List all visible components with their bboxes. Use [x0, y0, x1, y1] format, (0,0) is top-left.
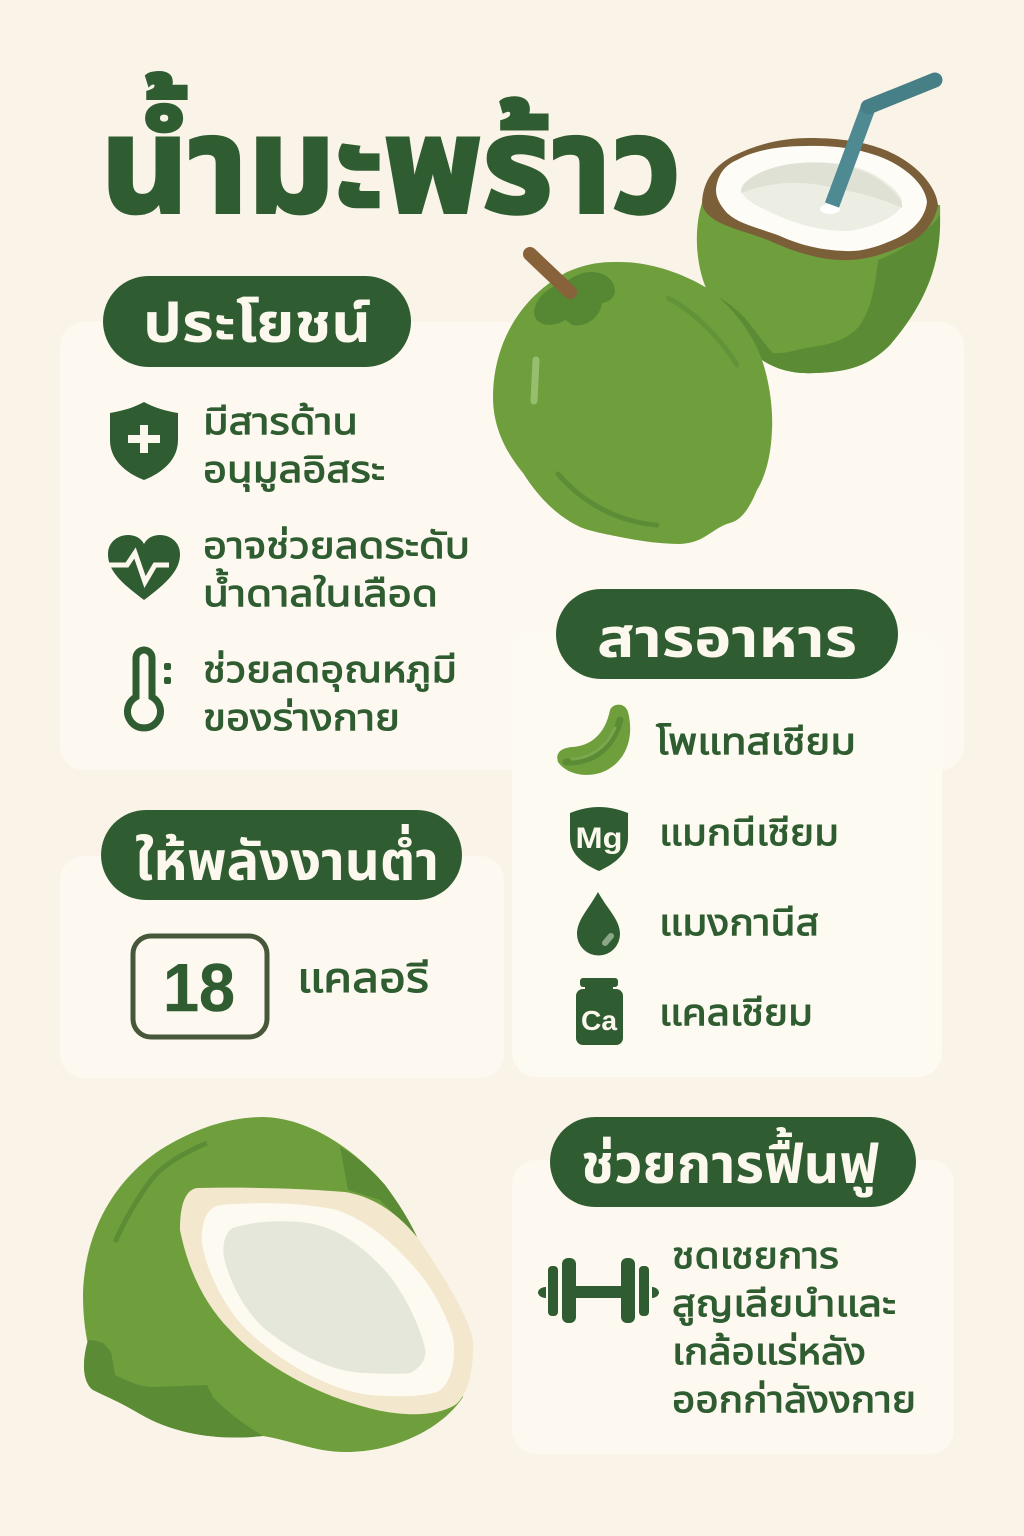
recovery text [672, 1235, 916, 1420]
heading: low energy: ให้พลังงานต่ำ [135, 824, 439, 892]
recovery text: ชดเชยการ [672, 1235, 839, 1276]
heading: benefits: ประโยชน์ [143, 294, 371, 354]
nutrient: manganese: แมงกานีส [659, 902, 819, 943]
benefit: blood sugar: อาจช่วยลดระดับ [203, 525, 470, 566]
illustration: whole green coconut [493, 254, 772, 544]
recovery text: เกล้อแร่หลัง [672, 1331, 866, 1372]
heading: low energy [101, 810, 462, 900]
heading: nutrients [556, 589, 898, 679]
heading: recovery [550, 1117, 916, 1207]
illustration: halved coconut [83, 1117, 473, 1452]
icon: calcium bottle: Ca [581, 1005, 617, 1036]
benefit: blood sugar [203, 525, 470, 614]
icon: dumbbell [538, 1258, 659, 1323]
icon: calcium bottle [576, 978, 623, 1045]
icon: manganese drop [577, 892, 620, 956]
heading: benefits [103, 276, 411, 367]
icon: magnesium shield: Mg [576, 822, 622, 855]
benefit: antioxidants: อนุมูลอิสระ [203, 449, 385, 492]
heading: recovery: ช่วยการฟื้นฟู [581, 1127, 879, 1197]
benefit: body temperature: ของร่างกาย [203, 697, 400, 738]
benefit: body temperature: ช่วยลดอุณหภูมี [203, 649, 457, 692]
icon: heart [108, 535, 180, 600]
panel: nutrients [512, 632, 942, 1077]
panel: benefits [60, 322, 964, 770]
icon: thermometer [127, 650, 171, 728]
icon: potassium banana [557, 705, 630, 775]
benefit: antioxidants [203, 401, 385, 492]
illustration: open coconut with straw [697, 80, 940, 373]
title: น้ำมะพร้าว [101, 73, 681, 241]
calorie value box [133, 936, 267, 1037]
icon: shield [110, 402, 178, 480]
recovery text: สูญเลียนำและ [672, 1283, 896, 1326]
panel: low energy [60, 856, 504, 1078]
calorie value box: 18 [163, 950, 235, 1026]
recovery text: ออกก่าลังงกาย [672, 1379, 916, 1420]
nutrient: potassium: โพแทสเชียม [656, 721, 856, 762]
benefit: antioxidants: มีสารด้าน [203, 401, 358, 442]
calorie unit: แคลอรี [297, 955, 429, 1001]
heading: nutrients: สารอาหาร [597, 609, 857, 669]
panel: recovery [512, 1160, 954, 1454]
nutrient: magnesium: แมกนีเชียม [659, 812, 839, 853]
benefit: blood sugar: น้ำดาลในเลือด [203, 568, 438, 614]
benefit: body temperature [203, 649, 457, 738]
icon: magnesium shield [570, 807, 628, 871]
nutrient: calcium: แคลเชียม [659, 992, 813, 1033]
